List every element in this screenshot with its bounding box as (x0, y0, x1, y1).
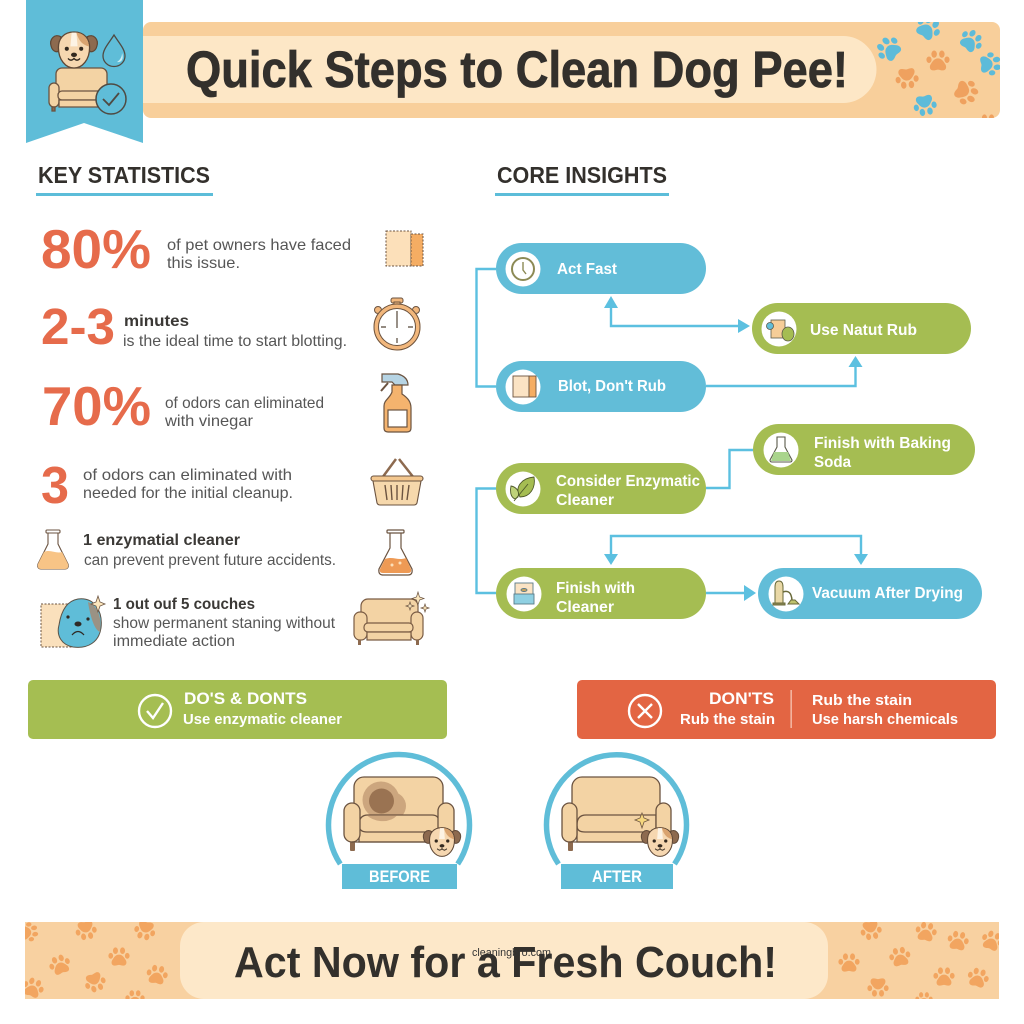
arrow: blot to use natural rub (706, 356, 862, 386)
icon: basket (371, 459, 423, 505)
icon: clean couch with sparkles (354, 592, 429, 645)
before illustration (328, 754, 470, 889)
pill: consider enzymatic cleaner: Cleaner (556, 492, 614, 509)
pill: use natural rub: Use Natut Rub (810, 322, 917, 339)
stat: 80 percent: this issue. (167, 255, 240, 272)
heading: key statistics: KEY STATISTICS (38, 162, 210, 188)
stat: 2-3 minutes: 2-3 (41, 298, 115, 355)
banner paw prints (877, 22, 1000, 118)
icon: large flask (379, 530, 412, 575)
pill: finish with cleaner (496, 568, 706, 619)
stat: 3 items: of odors can eliminated with (83, 467, 292, 484)
pill: consider enzymatic cleaner: Consider Enzymatic (556, 473, 700, 490)
stat: 80 percent: of pet owners have faced (167, 237, 351, 254)
connector: consider to finish bracket (476, 488, 496, 593)
before label (342, 864, 457, 889)
couch with stain (344, 777, 454, 851)
after label: AFTER (592, 867, 642, 886)
stat: 1 enzymatic cleaner: 1 enzymatial cleaner (83, 532, 240, 549)
panel: don'ts: Rub the stain (812, 692, 912, 709)
stat: 1 out of 5 couches (113, 596, 336, 650)
icon: small flask (38, 530, 68, 569)
stat: 70 percent: of odors can eliminated (165, 395, 324, 412)
pill: vacuum after drying (758, 568, 982, 619)
stat: 2-3 minutes (41, 298, 347, 355)
icon: cross circle (629, 695, 661, 727)
icon: couch (49, 68, 107, 111)
before label: BEFORE (369, 867, 430, 886)
heading: core insights: CORE INSIGHTS (497, 162, 667, 188)
stat: 1 out of 5 couches: immediate action (113, 633, 235, 650)
panel: do's: DO'S & DONTS (184, 689, 307, 708)
icon: vacuum (773, 581, 799, 605)
pill: finish with cleaner: Cleaner (556, 599, 614, 616)
icon: paper towel (386, 231, 423, 266)
stat: 1 enzymatic cleaner (83, 532, 336, 569)
after label (561, 864, 673, 889)
stat: 3 items (41, 457, 293, 515)
panel: do's (28, 680, 447, 739)
icon: stopwatch (374, 298, 420, 350)
stat: 80 percent (41, 218, 351, 280)
icon: cleaning tub (514, 583, 534, 604)
arrow: finish to vacuum (706, 585, 756, 601)
pill: act fast: Act Fast (557, 261, 618, 278)
dog (423, 828, 461, 856)
stat: 1 out of 5 couches: 1 out ouf 5 couches (113, 596, 255, 613)
stat: 1 enzymatic cleaner: can prevent prevent future accidents. (84, 552, 336, 569)
ribbon badge with dog and couch icon (26, 0, 143, 143)
header banner (143, 22, 1000, 118)
footer paw prints (25, 922, 999, 999)
icon: leaf (510, 477, 534, 501)
icon: dog head (51, 32, 97, 68)
icon: towel (513, 376, 536, 397)
stat: 80 percent: 80% (41, 218, 151, 280)
icon: check circle (139, 695, 171, 727)
icon: product and leaf (766, 320, 794, 341)
connector: consider to baking soda (706, 450, 753, 488)
footer banner (25, 922, 999, 999)
pill: baking soda (753, 424, 975, 475)
stat: 3 items: 3 (41, 457, 69, 515)
stat: 2-3 minutes: minutes (124, 313, 189, 330)
icon: clock (512, 258, 534, 280)
stat: 70 percent: with vinegar (164, 413, 254, 430)
panel: don'ts: Rub the stain (680, 711, 775, 728)
pill: consider enzymatic cleaner (496, 463, 706, 514)
icon: water drop (103, 35, 125, 66)
pill: vacuum after drying: Vacuum After Drying (812, 585, 963, 602)
pill: blot don't rub: Blot, Don't Rub (558, 378, 666, 395)
icon: check badge (96, 84, 126, 114)
pill: baking soda: Finish with Baking (814, 435, 951, 452)
arrow: split to finish and vacuum (604, 536, 868, 565)
stat: 3 items: needed for the initial cleanup. (83, 485, 293, 502)
title: Quick Steps to Clean Dog Pee! (186, 41, 848, 98)
stat: 1 out of 5 couches: show permanent staning without (113, 615, 336, 632)
stat: 70 percent: 70% (42, 375, 151, 437)
after illustration (546, 755, 687, 889)
stat: 70 percent (42, 375, 324, 437)
icon: spray bottle (381, 374, 411, 432)
clean couch (562, 777, 671, 851)
pill: act fast (496, 243, 706, 294)
connector: act fast to blot bracket (476, 269, 496, 386)
panel: don'ts: DON'TS (709, 689, 774, 708)
watermark: cleaningbro.com (472, 947, 551, 959)
pill: baking soda: Soda (814, 454, 851, 471)
icon: sad blue dog with towel (41, 596, 105, 647)
stat: 2-3 minutes: is the ideal time to start blotting. (123, 333, 347, 350)
pill: finish with cleaner: Finish with (556, 580, 635, 597)
pill: blot don't rub (496, 361, 706, 412)
panel: don'ts (577, 680, 996, 739)
dog (641, 828, 679, 856)
panel: don'ts: Use harsh chemicals (812, 711, 958, 728)
arrow: act fast and use natural rub (604, 296, 750, 333)
panel: do's: Use enzymatic cleaner (183, 711, 342, 728)
pill: use natural rub (752, 303, 971, 354)
icon: green flask (770, 437, 792, 462)
call to action: Act Now for a Fresh Couch! (234, 938, 777, 987)
